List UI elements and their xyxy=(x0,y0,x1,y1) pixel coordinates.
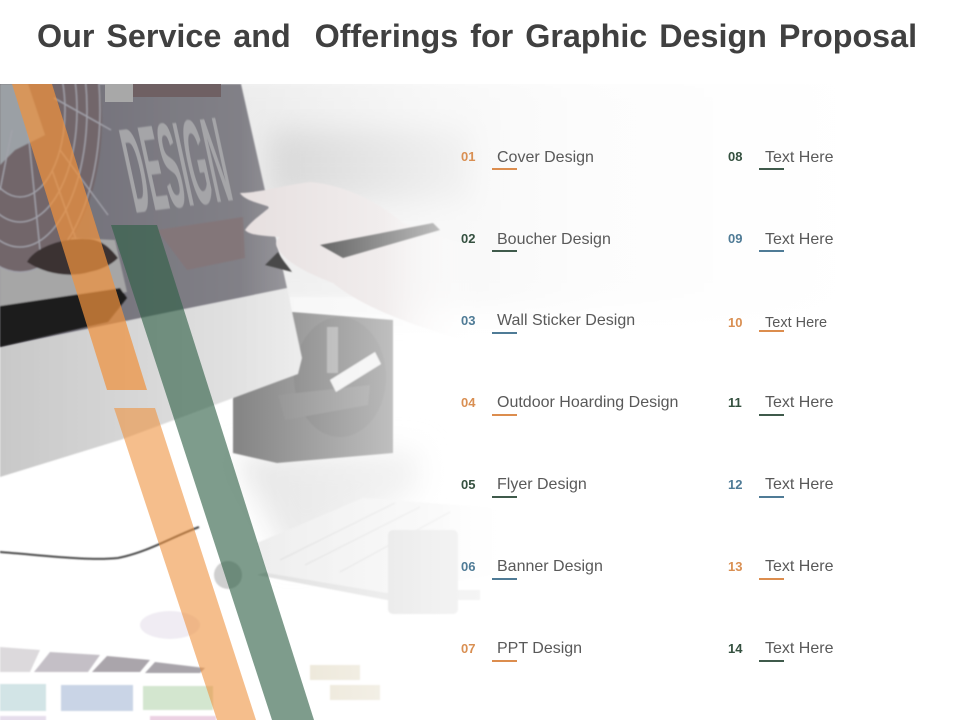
desk shadow xyxy=(240,455,412,535)
list item 12 xyxy=(728,476,833,498)
list item 01: Cover Design xyxy=(497,149,594,166)
list item 13: Text Here xyxy=(765,558,833,575)
orange diagonal bar, upper part xyxy=(12,84,147,390)
list item 03: 03 xyxy=(461,313,475,328)
monitor screen xyxy=(0,84,287,347)
list item 10 xyxy=(728,315,827,332)
list item 08 xyxy=(728,149,833,170)
colour swatches xyxy=(0,611,380,720)
hand xyxy=(240,182,402,318)
green diagonal bar xyxy=(111,225,314,720)
speaker xyxy=(233,297,393,463)
list item 03 xyxy=(461,312,635,334)
list item 03: Wall Sticker Design xyxy=(497,312,635,329)
list item 07: 07 xyxy=(461,641,475,656)
DESIGN lettering on screen: DESIGN xyxy=(112,92,240,239)
list item 13 xyxy=(728,558,833,580)
screen wheel graphic xyxy=(0,84,128,348)
list item 06: Banner Design xyxy=(497,558,603,575)
keyboard and cup xyxy=(214,507,480,614)
list item 05 xyxy=(461,476,587,498)
list item 14 xyxy=(728,640,833,662)
list item 14: 14 xyxy=(728,641,742,656)
list item 13: 13 xyxy=(728,559,742,574)
list item 14: Text Here xyxy=(765,640,833,657)
list item 11 xyxy=(728,394,833,416)
background photo: designer at monitor xyxy=(0,84,480,720)
list item 07 xyxy=(461,640,582,662)
monitor chin xyxy=(0,288,302,477)
orange diagonal bar, lower part xyxy=(114,408,256,720)
list item 04 xyxy=(461,394,678,416)
title: Our Service and Offerings for Graphic Design Proposal xyxy=(37,18,917,54)
list item 05: 05 xyxy=(461,477,475,492)
list item 09: Text Here xyxy=(765,231,833,248)
list item 01: 01 xyxy=(461,149,475,164)
list item 08: 08 xyxy=(728,149,742,164)
list item 06 xyxy=(461,558,603,580)
list item 09: 09 xyxy=(728,231,742,246)
list item 10: Text Here xyxy=(765,315,827,331)
list item 05: Flyer Design xyxy=(497,476,587,493)
list item 06: 06 xyxy=(461,559,475,574)
list item 04: Outdoor Hoarding Design xyxy=(497,394,678,411)
list item 07: PPT Design xyxy=(497,640,582,657)
list item 01 xyxy=(461,149,594,170)
monitor stand foot xyxy=(0,527,199,559)
list item 04: 04 xyxy=(461,395,475,410)
list item 12: 12 xyxy=(728,477,742,492)
pen xyxy=(265,223,440,272)
list item 08: Text Here xyxy=(765,149,833,166)
list item 11: 11 xyxy=(728,395,742,410)
screen label rectangle xyxy=(105,84,133,102)
list item 09 xyxy=(728,231,833,252)
list item 02: 02 xyxy=(461,231,475,246)
list item 12: Text Here xyxy=(765,476,833,493)
list item 10: 10 xyxy=(728,315,742,330)
list item 02 xyxy=(461,231,611,252)
list item 11: Text Here xyxy=(765,394,833,411)
white fade over the photo xyxy=(262,84,960,700)
swatch strip on screen xyxy=(157,217,245,270)
list item 02: Boucher Design xyxy=(497,231,611,248)
